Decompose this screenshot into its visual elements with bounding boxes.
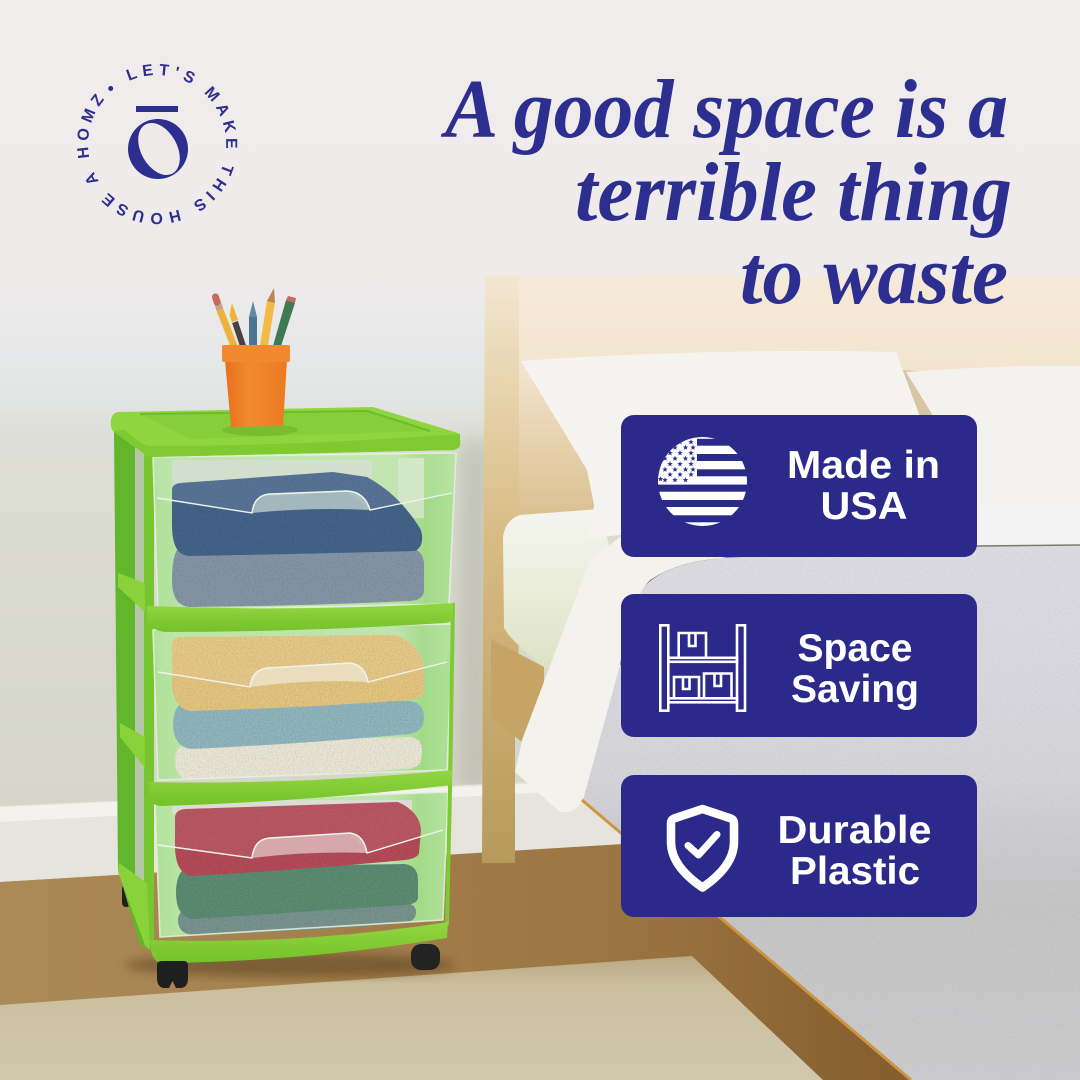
band under drawer 2 (149, 770, 452, 806)
white sheet strip (950, 505, 1080, 546)
green pencil (273, 296, 296, 346)
wall shadow near bed (462, 440, 488, 790)
left legs (114, 430, 150, 950)
side rails (118, 573, 145, 612)
dot (108, 86, 113, 91)
blanket edge line (620, 545, 1080, 665)
logo badge (77, 64, 238, 224)
drawer 1 (153, 453, 456, 610)
drawer 3 (155, 792, 448, 937)
badge label: USA (820, 485, 908, 528)
cup body (225, 360, 287, 427)
dark pencil (230, 303, 243, 346)
back left caster (122, 885, 131, 907)
badge label: Made in (787, 444, 940, 487)
badge label (791, 627, 919, 711)
handle (250, 663, 368, 687)
logo mark (128, 106, 188, 182)
side panel (135, 445, 147, 930)
handle (252, 833, 367, 858)
icon: shield with check (671, 809, 734, 888)
tall yellow pencil (260, 288, 275, 346)
pencil cup (216, 288, 296, 427)
towels (175, 802, 421, 935)
badge: durable plastic (621, 775, 977, 917)
front left caster (157, 961, 188, 988)
headboard panel (518, 276, 1080, 526)
front lip (153, 624, 453, 687)
headline: terrible thing (575, 146, 1012, 239)
right pillow (906, 366, 1080, 510)
cup rim (222, 345, 290, 362)
blanket (582, 545, 1080, 1080)
headline (440, 63, 1012, 322)
yellow pencil with eraser (216, 297, 234, 346)
badge: made in USA (621, 415, 977, 557)
icon: US flag circle (658, 437, 747, 527)
right stile (447, 603, 453, 925)
headline: to waste (740, 229, 1008, 322)
badge label: Saving (791, 668, 919, 711)
three drawer storage cart (111, 288, 460, 988)
front right caster (411, 944, 440, 970)
handle (252, 491, 370, 513)
lid (111, 407, 460, 457)
pencils (216, 288, 296, 346)
floor (0, 843, 1000, 1080)
headline: A good space is a (440, 63, 1008, 156)
cabinet shadow (125, 953, 455, 977)
cup shadow on lid (222, 424, 298, 436)
icon: shelves with boxes (660, 625, 745, 711)
towels (172, 472, 424, 607)
bed post (482, 275, 519, 863)
bed frame edge (582, 800, 911, 1080)
blue pencil (249, 301, 257, 346)
badge label: Plastic (790, 850, 920, 893)
badge: space saving (621, 594, 977, 737)
rug (0, 956, 823, 1080)
pillow gap (900, 370, 940, 420)
towels (172, 635, 424, 780)
duvet flap (515, 537, 727, 812)
drawer 2 (153, 624, 453, 780)
badge label: Durable (778, 809, 932, 852)
front lip (155, 792, 448, 858)
base (150, 922, 448, 963)
badge label (778, 809, 932, 893)
badge label: Space (798, 627, 912, 670)
front stile (144, 453, 154, 943)
mattress sheet (503, 509, 640, 670)
front lip (153, 453, 456, 513)
badge label (787, 444, 940, 528)
baseboard (0, 778, 620, 882)
left pillow (521, 351, 925, 560)
circular tagline: LET'S MAKE THIS HOUSE A HOMZ (77, 64, 238, 224)
band under drawer 1 (147, 603, 453, 632)
bed (482, 275, 1080, 1080)
side rail (491, 639, 544, 742)
